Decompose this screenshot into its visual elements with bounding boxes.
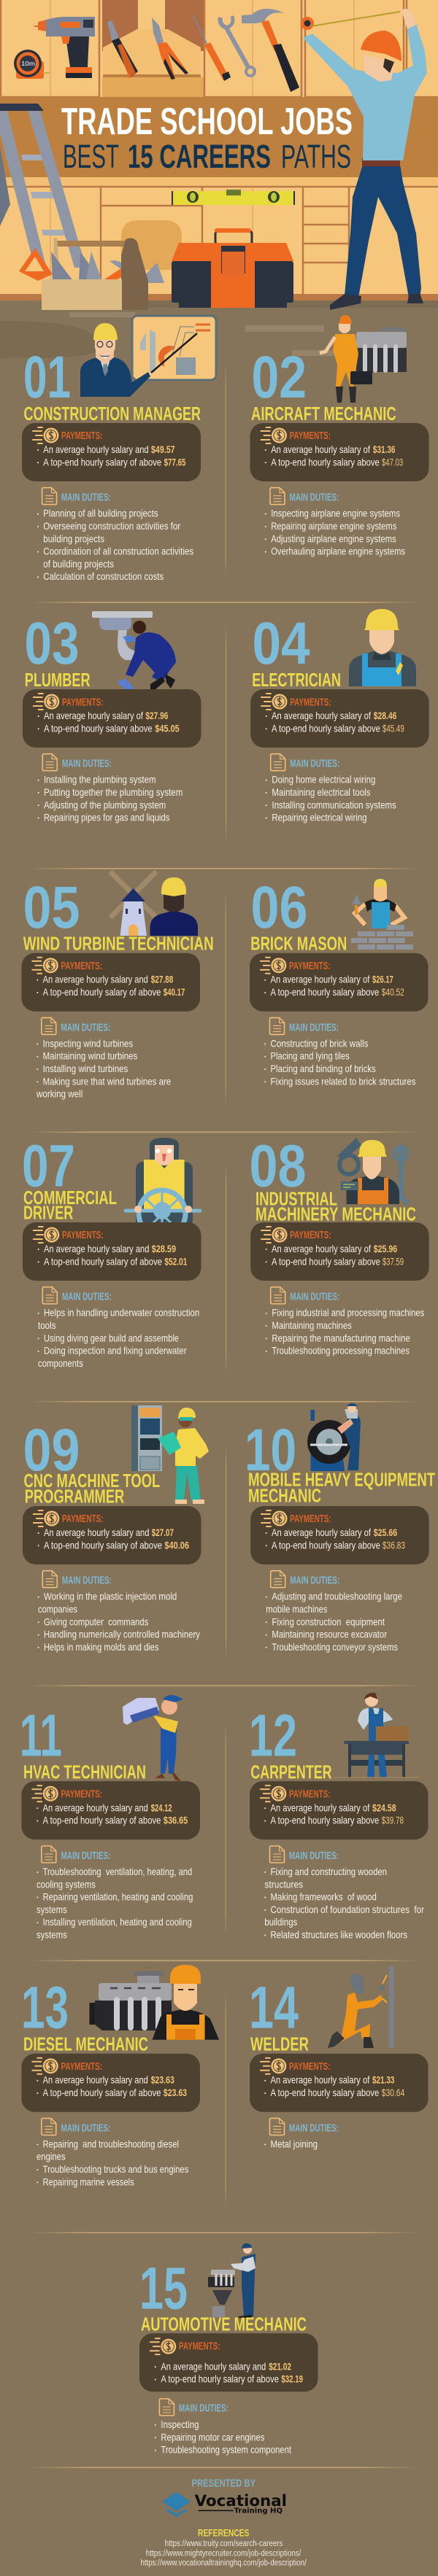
main duties: Repairing motor car engines [161, 2431, 264, 2443]
job title: BRICK MASON [250, 934, 347, 954]
job title: MECHANIC [248, 1486, 321, 1506]
icon: wrench [220, 16, 255, 76]
main duties: MAIN DUTIES: [61, 1850, 111, 1862]
main duties: Maintaining resource excavator [272, 1629, 387, 1640]
panel: payments [22, 953, 200, 1012]
icon: windmill and technician [110, 872, 198, 936]
panel: payments: A top-end hourly salary of above [44, 1539, 162, 1551]
main duties: Adjusting of the plumbing system [44, 799, 166, 810]
main duties: Doing home electrical wiring [272, 774, 375, 785]
references list: https://www.mightyrecruiter.com/job-descriptions/ [146, 2549, 301, 2558]
main duties [38, 1287, 199, 1369]
illustration: worker measuring [301, 9, 427, 310]
main duties: MAIN DUTIES: [62, 1575, 112, 1587]
panel: payments: PAYMENTS: [61, 961, 102, 972]
panel: payments: An average hourly salary of [270, 974, 369, 985]
main duties: Coordination of all construction activities [43, 546, 193, 557]
panel: payments: $30.64 [382, 2087, 404, 2098]
arch niche [121, 220, 182, 270]
icon: mechanic with engine [320, 315, 407, 403]
icon: welder [328, 1966, 394, 2048]
section 03: plumber [23, 610, 201, 823]
icon: plumber under sink [92, 611, 176, 691]
subtitle: 15 CAREERS [128, 138, 271, 175]
section 11: hvac technician [20, 1695, 200, 1940]
icon: screwdriver [193, 15, 231, 81]
main duties: Repairing pipes for gas and liquids [44, 812, 169, 823]
main duties: Troubleshooting ventilation, heating, and [43, 1866, 192, 1877]
panel: payments: $36.83 [383, 1539, 405, 1551]
main duties: Inspecting [161, 2418, 199, 2430]
number: 07 [22, 1133, 75, 1200]
icon: diesel mechanic with engine [89, 1965, 219, 2040]
number: 02 [251, 344, 307, 411]
panel: payments: An average hourly salary of [272, 1526, 371, 1538]
panel: payments: A top-end hourly salary above [270, 986, 379, 998]
main duties: components [38, 1357, 83, 1369]
job title: PROGRAMMER [25, 1487, 124, 1508]
panel: payments: $23.63 [164, 2087, 187, 2098]
panel: payments [22, 1781, 200, 1839]
main duties: Maintaining electrical tools [272, 786, 371, 798]
main duties [38, 1571, 200, 1653]
main duties: Working in the plastic injection mold [44, 1591, 177, 1602]
panel: payments: A top-end hourly salary of above [43, 2087, 161, 2098]
panel: payments: $27.96 [145, 710, 169, 721]
logo: vocational training hq [162, 2492, 287, 2517]
panel: payments: PAYMENTS: [289, 2061, 330, 2073]
main duties [155, 2399, 291, 2456]
head [364, 55, 394, 82]
subtitle: BEST [63, 138, 119, 175]
main duties: MAIN DUTIES: [62, 759, 112, 770]
panel: payments: $52.01 [164, 1255, 188, 1267]
panel: payments: PAYMENTS: [62, 1513, 104, 1525]
panel: payments: PAYMENTS: [290, 1513, 331, 1525]
icon: hammer [242, 9, 299, 92]
chimney hood [102, 0, 204, 98]
main duties [266, 1571, 402, 1653]
icon: automotive mechanic [208, 2243, 256, 2318]
main duties: Doing inspection and fixing underwater [44, 1345, 187, 1357]
illustration: orange toolbox [172, 228, 293, 308]
section 08: industrial machinery mechanic [250, 1133, 429, 1357]
job title: COMMERCIAL [23, 1188, 117, 1209]
panel: payments: PAYMENTS: [61, 430, 102, 442]
upper cabinets [1, 0, 438, 97]
hero illustration: workshop [0, 0, 438, 359]
main duties: Calculation of construction costs [43, 570, 164, 582]
main duties [39, 754, 182, 823]
main duties: MAIN DUTIES: [289, 1850, 339, 1862]
main duties [36, 1017, 171, 1100]
main duties: Fixing construction equipment [272, 1615, 385, 1627]
main duties: Fixing and constructing wooden [270, 1866, 387, 1877]
main duties [38, 488, 193, 582]
icon: electrician [349, 609, 416, 686]
number: 01 [23, 344, 71, 411]
panel: payments: A top-end hourly salary above [270, 1815, 379, 1826]
main duties: Adjusting and troubleshooting large [272, 1591, 402, 1602]
floor strips [69, 312, 343, 356]
job title [23, 1188, 117, 1224]
panel: payments: A top-end hourly salary above [271, 456, 380, 468]
section 12: carpenter [249, 1693, 428, 1940]
horizontal dividers [28, 602, 420, 2468]
panel: payments: PAYMENTS: [290, 697, 331, 708]
main duties: systems [36, 1904, 67, 1915]
panel: payments: An average hourly salary of [271, 443, 370, 455]
panel: payments: PAYMENTS: [61, 2061, 102, 2073]
panel: payments: $25.66 [374, 1526, 397, 1538]
panel: payments: PAYMENTS: [289, 1789, 330, 1801]
logo: vocational training hq: Training HQ [234, 2507, 283, 2515]
main duties: Using diving gear build and assemble [44, 1332, 179, 1343]
illustration: spirit level [172, 190, 295, 205]
job title: AUTOMOTIVE MECHANIC [141, 2315, 307, 2335]
job title [256, 1190, 416, 1225]
panel: payments: $32.19 [281, 2373, 303, 2385]
main duties: Repairing and troubleshooting diesel [43, 2138, 179, 2149]
panel: payments: $49.57 [151, 443, 175, 455]
main duties: MAIN DUTIES: [290, 1575, 339, 1587]
panel: payments [250, 953, 428, 1012]
main duties: structures [264, 1878, 303, 1890]
number: 08 [250, 1133, 307, 1200]
main duties [265, 1017, 416, 1087]
panel: payments [250, 2054, 428, 2112]
panel: payments: An average hourly salary and [43, 974, 148, 985]
main duties: mobile machines [266, 1603, 327, 1615]
job title: PLUMBER [25, 670, 91, 691]
panel: payments: $77.65 [164, 456, 186, 468]
main duties: MAIN DUTIES: [61, 1022, 111, 1033]
main duties: MAIN DUTIES: [289, 492, 339, 504]
main duties: MAIN DUTIES: [290, 1292, 339, 1303]
illustration: wooden toolbox [19, 238, 164, 310]
main duties [265, 2118, 339, 2149]
panel: payments: A top-end hourly salary of above [43, 986, 161, 998]
main duties: MAIN DUTIES: [289, 1022, 339, 1033]
main duties: Constructing of brick walls [270, 1037, 368, 1049]
references list: https://www.truity.com/search-careers [165, 2540, 283, 2548]
job title [23, 1471, 160, 1508]
pants [345, 165, 421, 298]
main duties: Installing ventilation, heating and cooling [43, 1916, 192, 1928]
panel: payments: An average hourly salary and [43, 1801, 148, 1813]
main duties [266, 1287, 424, 1357]
main duties: Overhauling airplane engine systems [271, 546, 405, 557]
icon: pliers [152, 18, 188, 79]
section 09: cnc machine tool programmer [23, 1405, 209, 1653]
section 01: construction manager [22, 316, 216, 582]
icon: hvac technician [123, 1695, 183, 1781]
logo: vocational training hq: Vocational [195, 2492, 287, 2510]
main duties: Related structures like wooden floors [270, 1928, 407, 1940]
main duties: building projects [43, 532, 104, 544]
main duties: engines [36, 2151, 66, 2162]
vertical dividers [225, 362, 226, 2211]
main duties [36, 1846, 193, 1940]
panel: payments [22, 423, 201, 481]
number: 14 [249, 1975, 299, 2041]
main duties: MAIN DUTIES: [61, 2122, 111, 2134]
presented by: PRESENTED BY [191, 2477, 256, 2489]
panel: payments: $28.59 [152, 1243, 176, 1254]
panel: payments [23, 1506, 201, 1564]
main duties: Placing and lying tiles [270, 1050, 350, 1062]
references list: https://www.vocationaltraininghq.com/job-description/ [140, 2559, 307, 2568]
panel: payments [250, 1222, 429, 1281]
main duties: companies [38, 1603, 77, 1615]
section 05: wind turbine technician [22, 872, 214, 1100]
references list [140, 2540, 307, 2568]
job title: CNC MACHINE TOOL [23, 1471, 160, 1491]
main duties: buildings [264, 1916, 297, 1928]
icon: tape measure: 10m [21, 60, 35, 67]
main duties: Troubleshooting trucks and bus engines [43, 2163, 188, 2175]
panel: payments: A top-end hourly salary of above [43, 456, 161, 468]
main duties: Repairing the manufacturing machine [272, 1332, 410, 1343]
icon: brick mason [351, 879, 413, 950]
main duties: Giving computer commands [44, 1615, 148, 1627]
job title: DRIVER [23, 1203, 73, 1224]
main duties: working well [36, 1088, 82, 1100]
section 02: aircraft mechanic [250, 315, 429, 557]
job title: WIND TURBINE TECHNICIAN [23, 934, 214, 954]
section 13: diesel mechanic [21, 1965, 219, 2187]
panel: payments: An average hourly salary and [44, 1526, 149, 1538]
main duties: MAIN DUTIES: [290, 759, 339, 770]
panel: payments: An average hourly salary and [43, 2074, 148, 2086]
main duties: Maintaining machines [272, 1319, 352, 1331]
panel: payments: PAYMENTS: [290, 1230, 331, 1241]
section 10: mobile heavy equipment mechanic [245, 1403, 436, 1653]
job title: DIESEL MECHANIC [23, 2035, 148, 2055]
main duties: Placing and binding of bricks [270, 1063, 376, 1074]
main duties: Making frameworks of wood [270, 1891, 377, 1903]
main duties: Troubleshooting conveyor systems [272, 1641, 398, 1653]
panel: payments [22, 2054, 200, 2112]
main duties: Adjusting airplane engine systems [271, 532, 396, 544]
main duties: Inspecting wind turbines [43, 1037, 133, 1049]
icon: cnc machine and programmer [131, 1405, 209, 1504]
panel: payments: A top-end hourly salary of above [44, 1255, 162, 1267]
icon: carpenter at bench [333, 1693, 420, 1777]
panel: payments: An average hourly salary of [272, 1243, 371, 1254]
panel: payments: $45.05 [155, 722, 180, 734]
lower cabinets [0, 187, 438, 295]
panel: payments: PAYMENTS: [289, 430, 331, 442]
icon: tyre mechanic [307, 1403, 361, 1471]
panel: payments: PAYMENTS: [62, 1230, 104, 1241]
panel: payments: $39.78 [382, 1815, 404, 1826]
main duties: Putting together the plumbing system [44, 786, 182, 798]
main duties: Installing the plumbing system [44, 774, 156, 785]
panel: payments: $37.59 [383, 1255, 404, 1267]
panel: payments: $24.12 [151, 1801, 172, 1813]
panel: payments [23, 1222, 201, 1281]
shoes [330, 294, 361, 310]
main duties: of building projects [43, 558, 114, 570]
panel: payments: $40.06 [164, 1539, 189, 1551]
icon: machinery mechanic [337, 1138, 407, 1204]
main duties: Planning of all building projects [43, 508, 158, 519]
main duties [264, 1846, 424, 1940]
section 04: electrician [250, 609, 429, 823]
panel: payments: An average hourly salary and [44, 1243, 149, 1254]
panel: payments: $45.49 [383, 722, 404, 734]
section 15: automotive mechanic [139, 2243, 318, 2456]
number: 03 [25, 610, 79, 677]
panel: payments: $21.02 [269, 2360, 291, 2372]
panel: payments: An average hourly salary of [272, 710, 371, 721]
job title: CARPENTER [250, 1762, 332, 1782]
main duties: systems [36, 1928, 67, 1940]
panel: payments: PAYMENTS: [61, 1789, 102, 1801]
main duties: Helps in handling underwater construction [44, 1307, 199, 1319]
icon: utility knife [107, 20, 138, 79]
section 14: welder [249, 1966, 428, 2149]
panel: payments [250, 689, 429, 748]
section 07: commercial driver [22, 1133, 201, 1369]
panel: payments: PAYMENTS: [62, 697, 104, 708]
number: 10 [245, 1417, 296, 1483]
panel: payments: A top-end hourly salary above [44, 722, 153, 734]
main duties: Handling numerically controlled machinery [44, 1629, 200, 1640]
skirting [0, 294, 438, 300]
main duties: Inspecting airplane engine systems [271, 508, 400, 519]
number: 12 [249, 1702, 297, 1769]
panel: payments: An average hourly salary of [270, 1801, 369, 1813]
main duties: Helps in making molds and dies [44, 1641, 158, 1653]
panel: payments: A top-end hourly salary above [272, 1539, 380, 1551]
panel: payments: $31.36 [373, 443, 396, 455]
panel: payments: $27.88 [151, 974, 173, 985]
panel: payments [250, 1781, 428, 1839]
subtitle: PATHS [281, 138, 351, 175]
panel: payments: A top-end hourly salary of above [161, 2373, 279, 2385]
icon: manager and board [80, 316, 216, 397]
main duties: MAIN DUTIES: [62, 1292, 112, 1303]
panel: payments: An average hourly salary and [43, 443, 149, 455]
panel: payments: $21.33 [372, 2074, 395, 2086]
main duties: Repairing marine vessels [43, 2176, 134, 2187]
references heading: REFERENCES [198, 2526, 249, 2538]
number: 15 [139, 2256, 188, 2322]
panel: payments: $28.46 [374, 710, 397, 721]
panel: payments: An average hourly salary of [44, 710, 143, 721]
panel: payments: $40.17 [164, 986, 185, 998]
panel: payments: $26.17 [372, 974, 393, 985]
panel: payments: $24.58 [372, 1801, 396, 1813]
panel: payments: PAYMENTS: [179, 2341, 220, 2353]
main duties [36, 2118, 188, 2187]
section 06: brick mason [250, 874, 428, 1087]
shirt [303, 23, 427, 160]
job title [248, 1470, 436, 1506]
number: 11 [20, 1702, 62, 1769]
main duties: Making sure that wind turbines are [43, 1075, 171, 1087]
panel: payments: $40.52 [382, 986, 404, 998]
panel: payments: An average hourly salary and [161, 2360, 266, 2372]
main duties: MAIN DUTIES: [289, 2122, 339, 2134]
number: 05 [23, 874, 80, 941]
main duties: Repairing electrical wiring [272, 812, 366, 823]
panel: payments: $27.07 [152, 1526, 174, 1538]
number: 06 [251, 874, 308, 941]
job title: WELDER [250, 2035, 309, 2055]
number: 04 [253, 610, 310, 677]
panel: payments [250, 423, 429, 481]
main duties [266, 488, 405, 557]
icon: drill [34, 17, 95, 78]
panel: payments: $23.63 [151, 2074, 174, 2086]
panel: payments [250, 1506, 429, 1564]
main duties: Overseeing construction activities for [43, 520, 180, 532]
job title: INDUSTRIAL [256, 1190, 337, 1210]
main duties: tools [38, 1319, 55, 1331]
panel: payments: A top-end hourly salary of above [43, 1815, 161, 1826]
main duties: Metal joining [270, 2138, 318, 2149]
hands and tape [402, 9, 416, 29]
number: 13 [21, 1975, 69, 2041]
panel: payments: $25.96 [374, 1243, 397, 1254]
main duties: Troubleshooting system component [161, 2444, 291, 2456]
main duties: cooling systems [36, 1878, 96, 1890]
main duties: MAIN DUTIES: [179, 2403, 228, 2415]
title band [0, 97, 438, 177]
panel: payments: PAYMENTS: [289, 961, 330, 972]
panel: payments [139, 2333, 318, 2391]
main duties: Installing communication systems [272, 799, 396, 810]
main duties: Repairing airplane engine systems [271, 520, 396, 532]
panel: payments: An average hourly salary of [270, 2074, 369, 2086]
main duties: Repairing ventilation, heating and cooling [43, 1891, 193, 1903]
wall [0, 0, 438, 300]
icon: driver at wheel [126, 1138, 200, 1237]
job title: CONSTRUCTION MANAGER [23, 404, 201, 424]
number: 09 [23, 1417, 80, 1483]
illustration: stepladder [0, 104, 86, 275]
panel: payments: $36.65 [164, 1815, 188, 1826]
job title: HVAC TECHNICIAN [23, 1762, 146, 1782]
panel: payments: A top-end hourly salary above [272, 722, 380, 734]
panel: payments: $47.03 [382, 456, 403, 468]
panel: payments: A top-end hourly salary above [272, 1255, 380, 1267]
main duties: Installing wind turbines [43, 1063, 128, 1074]
main duties: MAIN DUTIES: [61, 492, 111, 504]
main duties [266, 754, 396, 823]
panel: payments: A top-end hourly salary above [270, 2087, 379, 2098]
panel: payments [23, 689, 201, 748]
job title: ELECTRICIAN [252, 670, 341, 691]
icon: tape measure [14, 50, 50, 79]
main duties: Maintaining wind turbines [43, 1050, 137, 1062]
